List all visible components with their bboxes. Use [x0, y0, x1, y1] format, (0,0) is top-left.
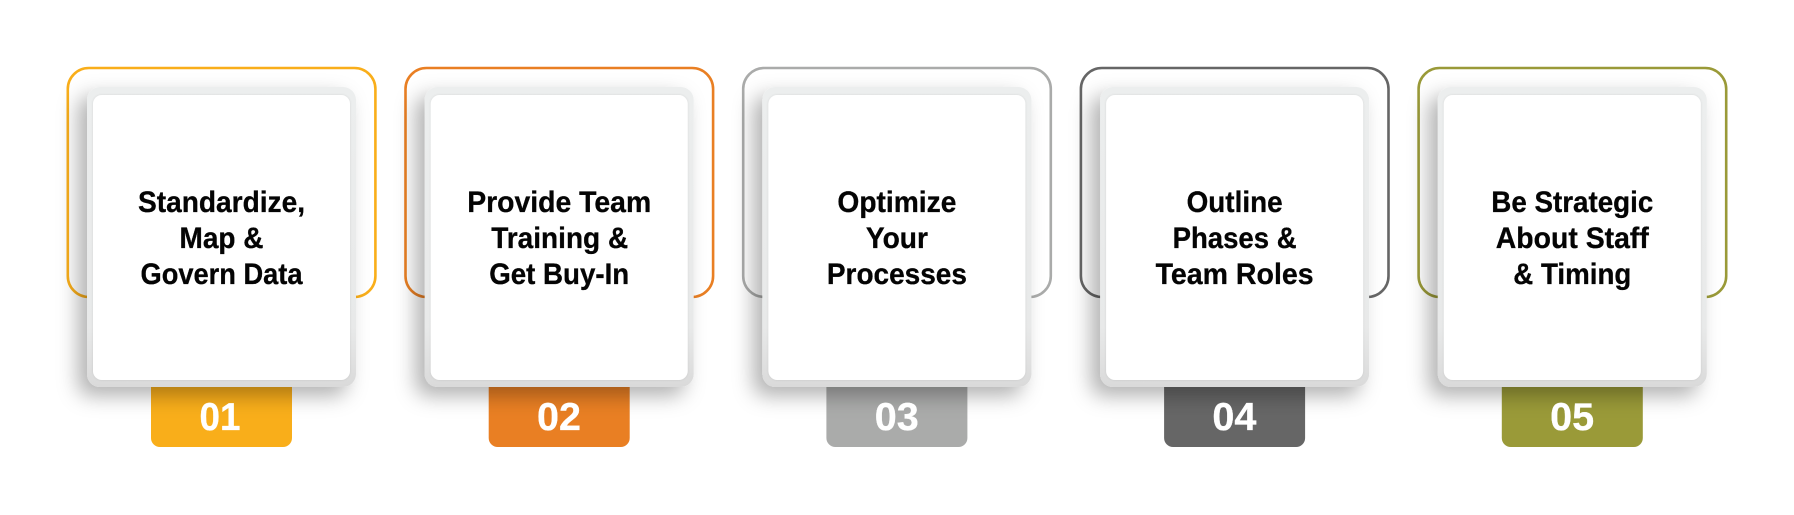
card 05: [1438, 87, 1707, 387]
heading 01: Govern Data: [140, 258, 303, 291]
card 04: [1100, 87, 1369, 387]
heading 03: Processes: [827, 258, 967, 291]
card face 02: [431, 95, 688, 380]
heading 01: [138, 186, 305, 291]
outline frame 05: [1419, 68, 1726, 297]
number 05: 05: [1550, 396, 1594, 439]
heading 02: Get Buy-In: [489, 258, 629, 291]
heading 03: Your: [866, 222, 928, 255]
outline frame 02: [406, 68, 713, 297]
card face 01: [93, 95, 350, 380]
card 02: [425, 87, 694, 387]
panel: step 01: [68, 68, 375, 447]
card 03: [762, 87, 1031, 387]
heading 04: Phases &: [1173, 222, 1297, 255]
heading 05: About Staff: [1496, 222, 1650, 255]
number tab 02: [489, 380, 630, 447]
number 02: 02: [537, 396, 581, 439]
panel: step 03: [743, 68, 1051, 447]
heading 05: Be Strategic: [1491, 186, 1653, 219]
heading 04: Outline: [1187, 186, 1283, 219]
heading 02: Training &: [491, 222, 628, 255]
heading 05: [1491, 186, 1653, 291]
heading 04: [1156, 186, 1314, 291]
number 04: 04: [1212, 396, 1257, 439]
panel: step 02: [406, 68, 713, 447]
panel: step 05: [1419, 68, 1726, 447]
panel: step 04: [1081, 68, 1388, 447]
heading 02: [467, 186, 651, 291]
heading 03: [827, 186, 967, 291]
heading 03: Optimize: [837, 186, 956, 219]
card 01: [87, 87, 356, 387]
heading 04: Team Roles: [1156, 258, 1314, 291]
number 03: 03: [875, 396, 919, 439]
outline frame 01: [68, 68, 375, 297]
card face 04: [1106, 95, 1363, 380]
heading 01: Standardize,: [138, 186, 305, 219]
number tab 03: [826, 380, 967, 447]
number tab 05: [1502, 380, 1643, 447]
outline frame 04: [1081, 68, 1388, 297]
heading 05: & Timing: [1513, 258, 1631, 291]
heading 02: Provide Team: [467, 186, 651, 219]
number tab 01: [151, 380, 292, 447]
number tab 04: [1164, 380, 1305, 447]
card face 05: [1444, 95, 1701, 380]
card face 03: [768, 95, 1025, 380]
number 01: 01: [200, 396, 240, 439]
outline frame 03: [743, 68, 1051, 297]
heading 01: Map &: [180, 222, 264, 255]
